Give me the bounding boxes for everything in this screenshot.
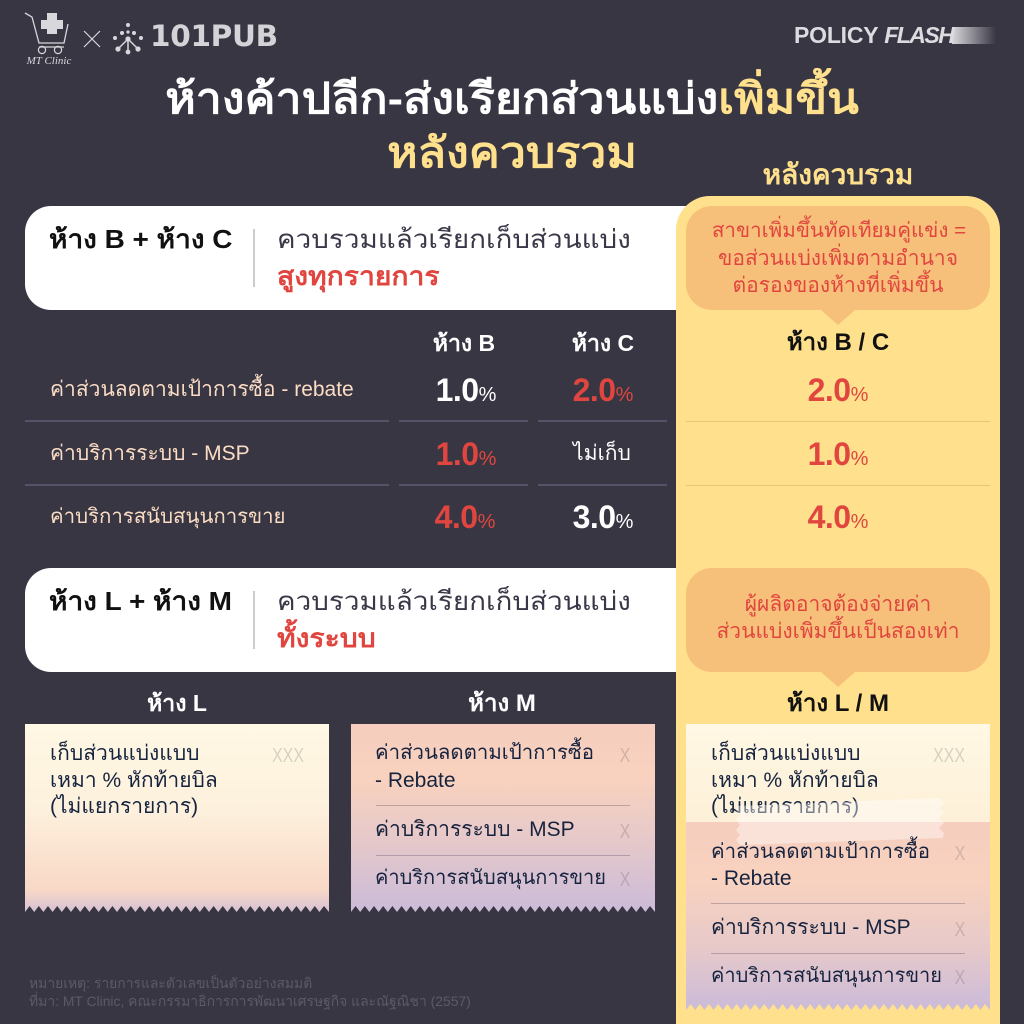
label: policy flash: POLICY FLASH <box>794 22 953 48</box>
heading: L + M: ห้าง L + ห้าง M <box>49 586 232 616</box>
item: MSP: ค่าบริการระบบ - MSP <box>711 916 911 939</box>
speed fade bar <box>952 27 996 44</box>
heading: B + C: ห้าง B + ห้าง C <box>49 224 232 254</box>
header: L / M: ห้าง L / M <box>787 690 889 717</box>
line one: สาขาเพิ่มขึ้นทัดเทียมคู่แข่ง = <box>712 219 966 242</box>
text: B + C highlight: สูงทุกรายการ <box>277 261 440 291</box>
text: L + M highlight: ทั้งระบบ <box>277 623 376 653</box>
row label: rebate: ค่าส่วนลดตามเป้าการซื้อ - rebate <box>50 378 354 401</box>
text: line three: (ไม่แยกรายการ) <box>50 795 198 818</box>
amount: sales support: X <box>954 967 965 989</box>
text: line two: เหมา % หักท้ายบิล <box>50 769 218 792</box>
line one: ผู้ผลิตอาจต้องจ่ายค่า <box>745 593 931 616</box>
divider: L + M <box>253 591 255 649</box>
tape <box>736 798 944 845</box>
item: rebate: ค่าส่วนลดตามเป้าการซื้อ <box>711 841 930 863</box>
column heading: after merger: หลังควบรวม <box>763 159 913 190</box>
footnote <box>29 974 471 1010</box>
icon: 101PUB burst <box>113 23 143 54</box>
value: B/C MSP: 1.0% <box>808 436 868 472</box>
text: line one: เก็บส่วนแบ่งแบบ <box>711 742 861 765</box>
footnote: ที่มา: MT Clinic, คณะกรรมาธิการการพัฒนาเศรษฐกิจ และณัฐณิชา (2557) <box>29 992 471 1008</box>
header: B / C: ห้าง B / C <box>787 329 889 356</box>
amount placeholder: XXX <box>272 745 304 767</box>
receipt: L <box>25 724 329 912</box>
text: line two: เหมา % หักท้ายบิล <box>711 769 879 792</box>
divider: B + C <box>253 229 255 287</box>
item: sales support: ค่าบริการสนับสนุนการขาย <box>375 867 606 889</box>
icon: times separator <box>84 30 100 48</box>
receipt: L / M merged <box>686 724 990 1010</box>
brand: Policy Flash <box>794 22 994 48</box>
callout: L / M <box>686 568 990 672</box>
value: B/C rebate: 2.0% <box>808 372 868 408</box>
text: B + C claim: ควบรวมแล้วเรียกเก็บส่วนแบ่ง <box>277 224 631 254</box>
item: rebate second line: - Rebate <box>375 769 456 792</box>
amount: rebate: X <box>954 843 965 865</box>
callout text: L / M <box>716 593 960 643</box>
line three: ต่อรองของห้างที่เพิ่มขึ้น <box>733 274 943 297</box>
panel: after merger column <box>676 196 1000 1024</box>
item: rebate second line: - Rebate <box>711 867 792 890</box>
amount: rebate: X <box>619 745 630 767</box>
zigzag edge <box>25 906 329 912</box>
value: B MSP: 1.0% <box>436 436 496 472</box>
title line one: ห้างค้าปลีก-ส่งเรียกส่วนแบ่งเพิ่มขึ้น <box>165 75 859 122</box>
header: C: ห้าง C <box>572 330 634 356</box>
value: B support: 4.0% <box>435 499 495 535</box>
header: B: ห้าง B <box>433 330 495 356</box>
value: B rebate: 1.0% <box>436 372 496 408</box>
amount placeholder: XXX <box>933 745 965 767</box>
item: rebate: ค่าส่วนลดตามเป้าการซื้อ <box>375 742 594 764</box>
item: MSP: ค่าบริการระบบ - MSP <box>375 818 575 841</box>
receipt: M <box>351 724 655 912</box>
table: fee comparison <box>433 329 889 356</box>
zigzag edge <box>686 1004 990 1010</box>
amount: MSP: X <box>619 821 630 843</box>
row label: sales support: ค่าบริการสนับสนุนการขาย <box>50 506 285 528</box>
amount: MSP: X <box>954 919 965 941</box>
zigzag edge <box>351 906 655 912</box>
wordmark: 101PUB: 101PUB <box>150 19 278 53</box>
callout tail: L / M <box>821 672 855 687</box>
value: B/C support: 4.0% <box>808 499 868 535</box>
callout tail: B / C <box>821 310 855 325</box>
header: L: ห้าง L <box>147 690 207 716</box>
amount: sales support: X <box>619 869 630 891</box>
logo: MT Clinic: MT Clinic <box>26 55 71 67</box>
panel: card B + C <box>25 206 725 310</box>
header: M: ห้าง M <box>468 690 536 717</box>
title <box>165 68 859 176</box>
line two: ส่วนแบ่งเพิ่มขึ้นเป็นสองเท่า <box>716 620 960 643</box>
line two: ขอส่วนแบ่งเพิ่มตามอำนาจ <box>718 247 958 270</box>
text: L + M claim: ควบรวมแล้วเรียกเก็บส่วนแบ่ง <box>277 586 631 616</box>
footnote: หมายเหตุ: รายการและตัวเลขเป็นตัวอย่างสมมติ <box>29 975 312 991</box>
callout: B / C <box>686 206 990 310</box>
logo: 101PUB <box>113 19 278 54</box>
text: line one: เก็บส่วนแบ่งแบบ <box>50 742 200 765</box>
row label: MSP: ค่าบริการระบบ - MSP <box>50 442 250 465</box>
value: C support: 3.0% <box>573 499 633 535</box>
item: sales support: ค่าบริการสนับสนุนการขาย <box>711 965 942 987</box>
text: line three: (ไม่แยกรายการ) <box>711 795 859 818</box>
callout text: B / C <box>712 215 966 297</box>
logo: MT Clinic <box>24 12 72 67</box>
panel: card L + M <box>25 568 725 672</box>
value: C MSP: ไม่เก็บ <box>573 442 631 465</box>
value: C rebate: 2.0% <box>573 372 633 408</box>
title line two: หลังควบรวม <box>387 129 637 176</box>
